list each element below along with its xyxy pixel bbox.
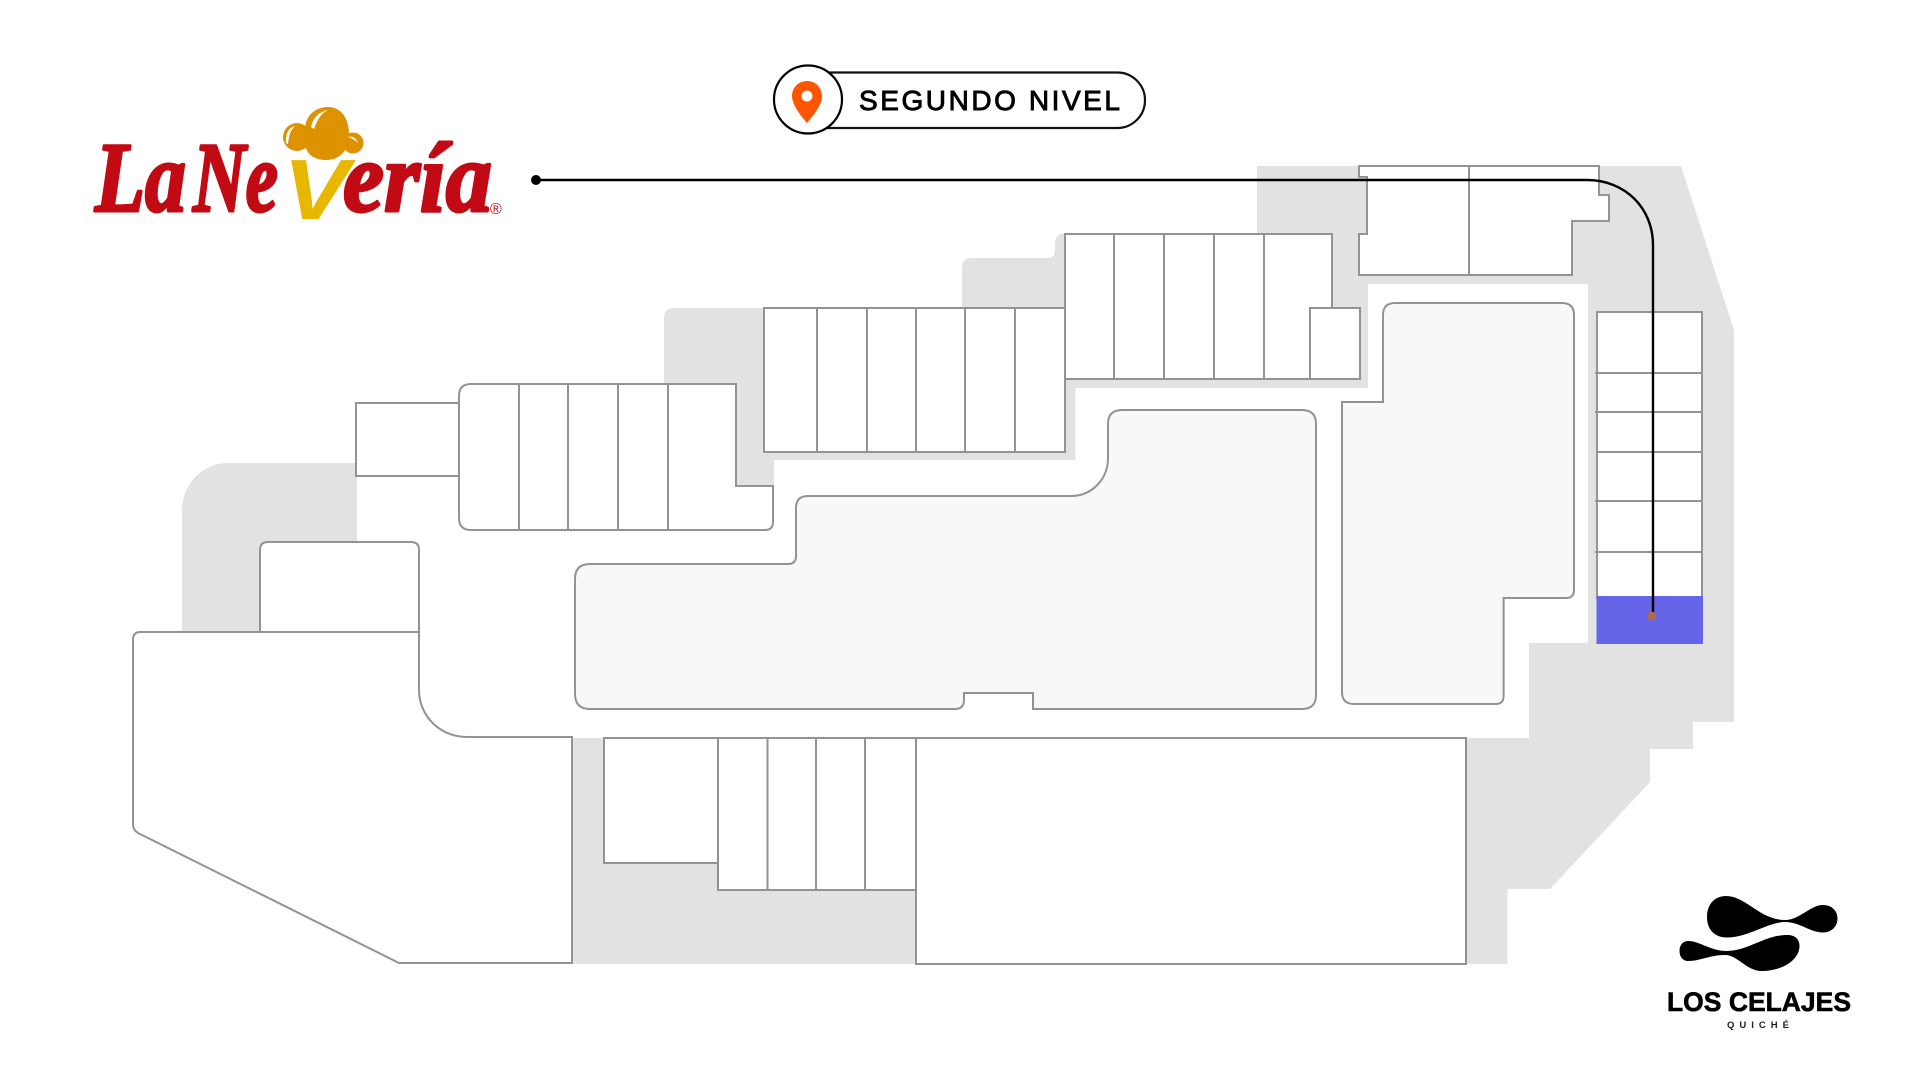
terrace area: left grey zone [182, 463, 357, 632]
floor plan [133, 166, 1734, 964]
store: upper left block [260, 542, 419, 632]
brand name: LOS CELAJES [1667, 987, 1851, 1017]
store row: middle shops [764, 308, 1065, 452]
store row: upper left shops [459, 384, 773, 530]
logo text: La [94, 122, 186, 233]
brand location: QUICHÉ [1727, 1020, 1789, 1031]
store: small corner shop [1310, 308, 1360, 379]
badge pill [775, 72, 1145, 128]
central open court [575, 410, 1316, 709]
store: top right block [1359, 166, 1609, 275]
logo: Los Celajes Quiché [1667, 896, 1851, 1031]
icon: ice cream scoops [283, 107, 364, 160]
connector line from logo to store [531, 175, 1656, 620]
store row: lower shops [718, 738, 916, 890]
store: small connector block [356, 403, 459, 476]
store: large left anchor [133, 632, 572, 963]
highlighted store: La Nevería location [1596, 596, 1703, 644]
east open court [1342, 303, 1574, 704]
icon: cloud shapes [1680, 896, 1838, 971]
logo text: V [283, 143, 356, 238]
store: lower left shop [604, 738, 718, 863]
logo text: ería [343, 122, 492, 233]
logo text [94, 122, 502, 238]
badge circle [774, 66, 842, 134]
logo: La Nevería [94, 107, 502, 238]
store: large lower anchor [916, 738, 1466, 964]
logo text: Ne [192, 122, 278, 233]
level badge [774, 66, 1145, 134]
store row: upper middle shops [1065, 234, 1332, 379]
badge label: SEGUNDO NIVEL [859, 85, 1120, 116]
icon: location pin [792, 81, 822, 123]
store column: right shops [1595, 312, 1702, 598]
logo text: ® [490, 201, 502, 218]
terrace area: right and bottom grey zone [572, 166, 1734, 964]
